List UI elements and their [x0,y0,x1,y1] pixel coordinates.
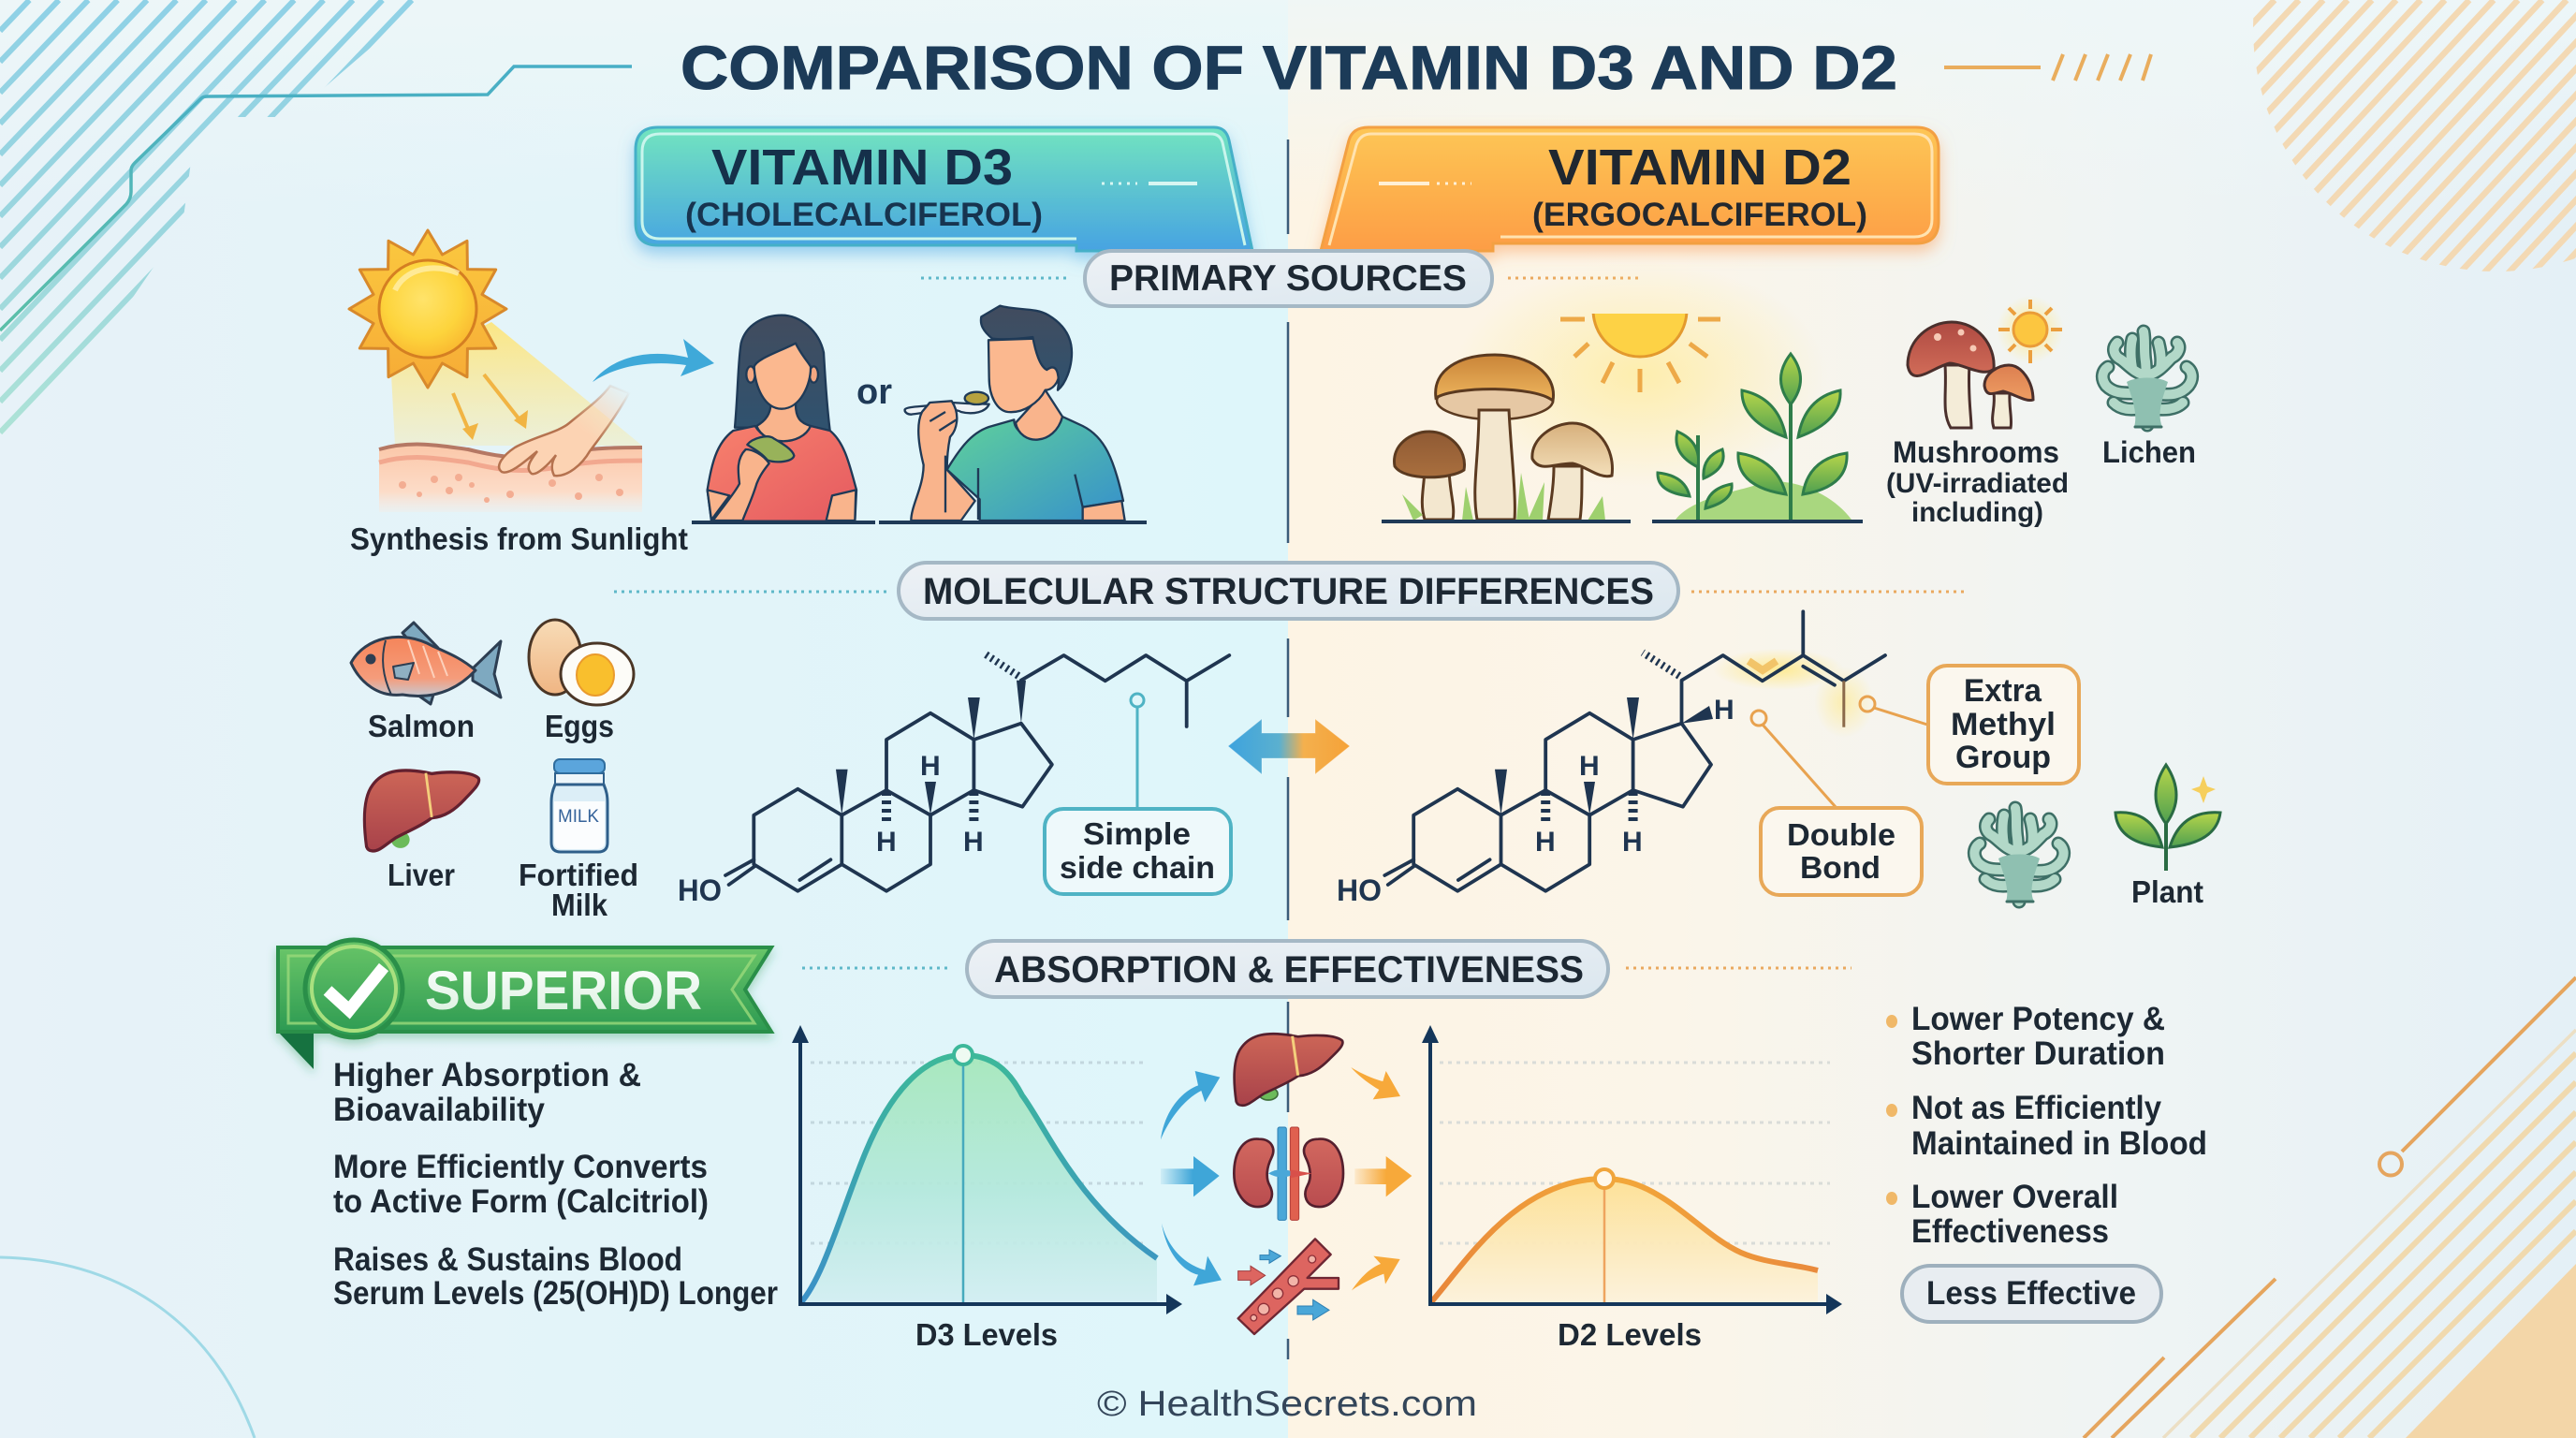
icon: plants [1658,354,1852,520]
text block: D2 drawbacks: Shorter Duration [1911,1035,2165,1072]
illustration: man eating with spoon [905,306,1125,521]
chart: D2 molecule: H [1714,695,1734,726]
chart: D3 molecule [678,653,1229,907]
section heading: Molecular Structure Differences [614,563,1964,619]
text block: D2 drawbacks: Lower Potency & [1911,1001,2165,1037]
callout: double bond: Double [1787,817,1895,852]
text block: D3 benefits: Bioavailability [333,1092,546,1128]
text block: D3 benefits: to Active Form (Calcitriol) [333,1183,709,1220]
section heading: Absorption & Effectiveness [802,941,1852,997]
label: D2 levels: D2 Levels [1558,1317,1702,1352]
chart: D3 molecule: H [876,827,897,858]
icon: sun [349,230,506,388]
label: liver: Liver [388,858,455,892]
icon: large mushroom [1436,355,1554,520]
label: fortified milk [519,858,638,922]
text block: D3 benefits [333,1057,778,1312]
icon: skin layers [379,445,642,512]
icon: blood vessel [1238,1239,1339,1334]
arrows and organs [1161,1034,1412,1334]
chart: D2 molecule: H [1622,827,1643,858]
illustration: woman eating [708,315,856,521]
callout: less effective: Less Effective [1926,1275,2136,1312]
text block: D2 drawbacks [1886,1001,2207,1250]
callout: simple side chain: side chain [1060,850,1215,885]
icon: grass [1402,473,1605,521]
center divider [1287,139,1289,1359]
text block: D2 drawbacks: Lower Overall [1911,1179,2118,1215]
ground lines: D2 [1382,520,1863,523]
callout: extra methyl group: Methyl [1951,707,2056,742]
label: mushrooms [1886,435,2069,528]
label: fortified milk: Milk [551,888,608,922]
section heading: Primary Sources [921,251,1641,306]
footer: copyright: © HealthSecrets.com [1097,1385,1477,1424]
icon: salmon [351,623,501,704]
chart: D3 molecule: H [963,827,984,858]
chart: D3 molecule: H [920,751,941,782]
icon: milk bottle [551,759,607,852]
icon: eggs [529,620,634,705]
chart: D3 levels [792,1025,1182,1352]
text block: D3 benefits: More Efficiently Converts [333,1149,708,1185]
label: mushrooms: including) [1911,497,2043,528]
callout: double bond [1751,711,1922,895]
label: eggs: Eggs [545,709,614,743]
callout: simple side chain: Simple [1083,816,1191,851]
subheading: ergocalciferol: (ERGOCALCIFEROL) [1532,197,1867,233]
chart: D2 molecule [1337,611,1885,907]
icon: left mushroom [1395,432,1465,520]
icon: liver organ [1235,1034,1342,1106]
callout: simple side chain [1045,694,1231,894]
callout: double bond: Bond [1800,850,1881,885]
icon: plant [2115,765,2220,871]
illustration: synthesis from sunlight [349,230,714,556]
label: plant: Plant [2131,874,2203,909]
icon: red mushrooms with small sun [1908,296,2064,428]
callout: extra methyl group: Group [1955,740,2051,775]
label: mushrooms: (UV-irradiated [1886,468,2069,499]
section heading: Primary Sources: PRIMARY SOURCES [1109,258,1467,299]
chart: D2 levels [1422,1025,1842,1352]
label: synthesis from sunlight: Synthesis from Sunlight [350,521,688,556]
heading: Vitamin D3: VITAMIN D3 [711,139,1013,196]
icon: kidneys [1234,1127,1343,1220]
section heading: Molecular Structure Differences: MOLECULAR STRUCTURE DIFFERENCES [923,571,1654,612]
label: superior: SUPERIOR [425,961,702,1021]
icon: lichen [2102,331,2192,427]
chart: D2 molecule: H [1579,751,1600,782]
label: milk: MILK [558,807,599,827]
text block: D3 benefits: Raises & Sustains Blood [333,1241,682,1278]
title accent right [1944,54,2151,81]
subheading: cholecalciferol: (CHOLECALCIFEROL) [685,197,1043,233]
badge: superior ribbon [278,940,771,1069]
label: fortified milk: Fortified [519,858,638,892]
icon: right mushroom [1532,423,1612,520]
label: or: or [856,373,892,412]
text block: D2 drawbacks: Not as Efficiently [1911,1090,2161,1126]
chart: D2 molecule: HO [1337,873,1382,907]
callout: extra methyl group: Extra [1964,673,2042,709]
text block: D3 benefits: Serum Levels (25(OH)D) Longer [333,1275,778,1312]
heading: Vitamin D2: VITAMIN D2 [1548,139,1852,196]
label: D3 levels: D3 Levels [915,1317,1058,1352]
text block: D2 drawbacks: Maintained in Blood [1911,1125,2207,1162]
icon: lichen small [1974,808,2064,902]
title: COMPARISON OF VITAMIN D3 AND D2 [681,33,1897,102]
chart: D3 molecule: HO [678,873,722,907]
chart: D2 molecule: H [1535,827,1556,858]
text block: D3 benefits: Higher Absorption & [333,1057,641,1093]
label: salmon: Salmon [368,709,475,743]
arrows: blue to organs [1161,1071,1222,1285]
arrow: double headed comparison [1228,719,1350,774]
section heading: Absorption & Effectiveness: ABSORPTION & EFFECTIVENESS [994,949,1584,990]
icon: liver food [364,770,479,851]
callout: less effective [1902,1266,2161,1322]
arrows: orange from organs [1351,1067,1412,1290]
label: mushrooms: Mushrooms [1893,435,2059,469]
icon: sun ray arrows [453,374,528,440]
panel: Vitamin D2 header [1321,127,1939,251]
icon: blue curved arrow [593,339,714,382]
illustration: D2 sun and mushrooms [1382,262,1863,521]
label: lichen: Lichen [2102,435,2196,469]
icon: hand [499,386,629,476]
callout: extra methyl group [1860,666,2079,784]
icon: half sun with beams [1484,278,1803,472]
ground lines: people [692,521,1147,524]
panel: Vitamin D3 header [636,127,1252,251]
text block: D2 drawbacks: Effectiveness [1911,1213,2109,1250]
